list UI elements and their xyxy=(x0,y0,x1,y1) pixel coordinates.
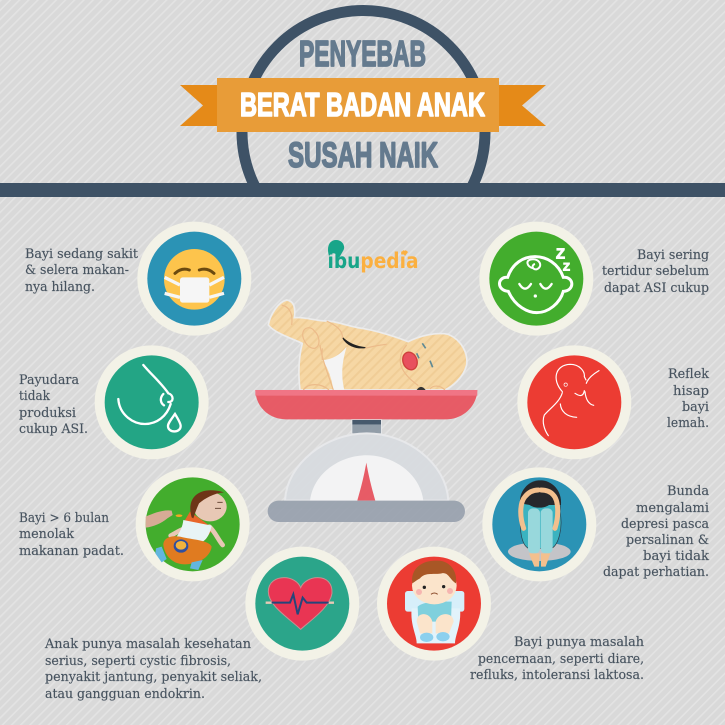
baby xyxy=(268,300,467,390)
text: solid food xyxy=(19,511,124,559)
text: falls asleep: Bayi sering xyxy=(637,248,709,263)
scale base xyxy=(268,501,465,522)
text: sick xyxy=(25,247,139,295)
text: serious health: serius, seperti cystic fibrosis, xyxy=(45,654,231,669)
header bar xyxy=(0,183,725,197)
scale pan xyxy=(255,390,477,419)
circle 8: sleeping baby xyxy=(479,222,593,336)
circle 6: depressed mother xyxy=(482,467,596,581)
scale neck xyxy=(351,419,382,434)
text: weak reflex: lemah. xyxy=(667,416,709,431)
text: falls asleep xyxy=(602,248,709,296)
text: solid food: makanan padat. xyxy=(19,544,124,559)
text: low milk xyxy=(19,373,88,437)
text: depression: dapat perhatian. xyxy=(603,565,709,580)
circle 3: baby refusing food xyxy=(136,467,250,581)
scale xyxy=(255,390,477,522)
text: low milk: cukup ASI. xyxy=(19,422,88,437)
scale dial xyxy=(285,433,448,501)
text: serious health: atau gangguan endokrin. xyxy=(45,687,205,702)
text: serious health: Anak punya masalah kesehatan xyxy=(44,637,252,652)
title: berat badan anak: BERAT BADAN ANAK xyxy=(240,86,485,123)
text: sick: & selera makan- xyxy=(25,263,129,278)
circle 5: child on toilet xyxy=(377,547,491,661)
circle 7: baby weak suckling xyxy=(517,345,631,459)
text: falls asleep: tertidur sebelum xyxy=(602,264,709,279)
logo: ibupedia: ibupedia xyxy=(328,249,418,273)
circle 8: sleeping baby: Z xyxy=(563,261,570,273)
text: serious health: penyakit jantung, penyakit seliak, xyxy=(45,670,262,685)
text: depression: bayi tidak xyxy=(643,549,709,564)
text: serious health xyxy=(44,637,262,702)
circle 8: sleeping baby: Z xyxy=(556,246,565,262)
title ring xyxy=(236,5,490,183)
text: sick: nya hilang. xyxy=(25,280,95,295)
text: weak reflex: Reflek xyxy=(668,367,709,382)
text: low milk: produksi xyxy=(19,406,76,421)
text: weak reflex: hisap xyxy=(673,384,709,399)
text: depression: Bunda xyxy=(667,484,709,499)
text: depression: persalinan & xyxy=(626,533,709,548)
text: depression: mengalami xyxy=(636,501,709,516)
circle 1: sick baby with mask xyxy=(137,222,251,336)
text: digestion: Bayi punya masalah xyxy=(514,635,645,650)
text: sick: Bayi sedang sakit xyxy=(25,247,139,262)
text: digestion: pencernaan, seperti diare, xyxy=(478,652,644,667)
logo: ibupedia xyxy=(328,240,418,273)
text: depression xyxy=(603,484,709,580)
ribbon banner xyxy=(180,78,546,132)
text: depression: depresi pasca xyxy=(621,517,709,532)
text: weak reflex xyxy=(667,367,709,431)
text: low milk: tidak xyxy=(19,389,50,404)
circle 4: heart with pulse xyxy=(245,547,359,661)
title: penyebab: PENYEBAB xyxy=(299,33,426,74)
title: susah naik: SUSAH NAIK xyxy=(288,136,438,175)
text: digestion: refluks, intoleransi laktosa. xyxy=(470,668,644,683)
text: weak reflex: bayi xyxy=(682,400,709,415)
text: solid food: menolak xyxy=(19,527,74,542)
text: low milk: Payudara xyxy=(19,373,79,388)
text: solid food: Bayi > 6 bulan xyxy=(19,511,110,526)
text: digestion xyxy=(470,635,645,683)
circle 2: breast icon xyxy=(95,345,209,459)
text: falls asleep: dapat ASI cukup xyxy=(604,281,709,296)
